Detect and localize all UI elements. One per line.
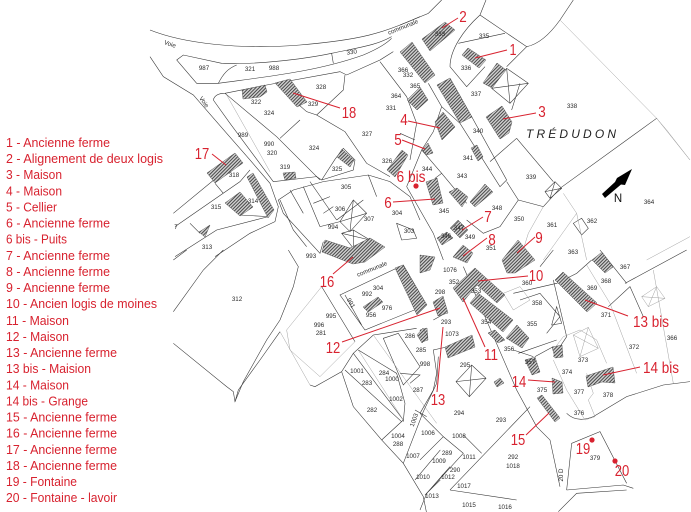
parcel numbers: 994 <box>328 224 339 231</box>
parcel numbers: 373 <box>578 357 589 364</box>
parcel numbers: 368 <box>601 278 612 285</box>
parcel numbers: 331 <box>386 105 397 112</box>
parcel numbers: Voie <box>197 95 210 110</box>
parcel numbers: 998 <box>420 361 431 368</box>
parcel numbers: 314 <box>248 198 259 205</box>
parcel numbers: 1001 <box>350 368 364 375</box>
parcel numbers: 1007 <box>406 453 420 460</box>
parcel numbers: 374 <box>562 369 573 376</box>
red map labels: 2 <box>459 9 467 26</box>
red map labels: 14 <box>512 374 527 391</box>
icon: north arrow <box>602 169 632 205</box>
legend: 7 - Ancienne ferme <box>6 249 110 263</box>
red map labels: 15 <box>511 432 525 449</box>
parcel numbers: 1016 <box>498 504 512 511</box>
parcel numbers: 367 <box>620 264 631 271</box>
legend: 16 - Ancienne ferme <box>6 426 117 440</box>
parcel numbers: 325 <box>332 166 343 173</box>
parcel numbers: 341 <box>463 155 474 162</box>
parcel numbers: 329 <box>308 101 319 108</box>
parcel numbers: 344 <box>422 166 433 173</box>
red map labels: 12 <box>326 340 340 357</box>
parcel numbers: 288 <box>393 441 404 448</box>
legend: 3 - Maison <box>6 168 62 182</box>
parcel numbers: 1008 <box>452 433 466 440</box>
parcel numbers: 1000 <box>385 376 399 383</box>
parcel numbers: 281 <box>316 330 327 337</box>
parcel numbers: 282 <box>367 407 378 414</box>
parcel numbers: 336 <box>461 65 472 72</box>
parcel numbers: 1002 <box>389 396 403 403</box>
parcel numbers: 1076 <box>443 267 457 274</box>
parcel numbers: 293 <box>496 417 507 424</box>
parcel numbers: 283 <box>362 380 373 387</box>
hatched buildings <box>199 22 615 422</box>
parcel numbers: 348 <box>492 205 503 212</box>
parcel numbers: 305 <box>341 184 352 191</box>
red map labels: 13 <box>431 392 445 409</box>
parcel numbers: 363 <box>568 249 579 256</box>
parcel numbers: 293 <box>441 319 452 326</box>
parcel numbers: 304 <box>392 210 403 217</box>
parcel numbers: 377 <box>574 389 585 396</box>
parcel numbers: 990 <box>264 141 275 148</box>
parcel numbers: 362 <box>587 218 598 225</box>
parcel numbers: communale <box>356 260 389 279</box>
parcel numbers: 993 <box>306 253 317 260</box>
red map labels: 5 <box>394 132 402 149</box>
parcel numbers: 350 <box>514 216 525 223</box>
parcel numbers: 315 <box>211 204 222 211</box>
parcel numbers: 988 <box>269 65 280 72</box>
legend: 4 - Maison <box>6 184 62 198</box>
parcel numbers: 322 <box>251 99 262 106</box>
parcel numbers: 287 <box>413 387 424 394</box>
legend <box>6 136 163 505</box>
parcel numbers: 995 <box>326 313 337 320</box>
legend: 2 - Alignement de deux logis <box>6 152 163 166</box>
parcel numbers: 313 <box>202 244 213 251</box>
parcel numbers: 361 <box>547 222 558 229</box>
red map labels: 6 bis <box>396 169 426 186</box>
parcel numbers: 335 <box>479 33 490 40</box>
parcel numbers: 1015 <box>462 502 476 509</box>
parcel numbers: 327 <box>362 131 373 138</box>
parcel numbers: 366 <box>398 67 409 74</box>
cadastral map: parcel lines <box>150 0 690 512</box>
parcel numbers: 371 <box>601 312 612 319</box>
parcel numbers: 321 <box>245 66 256 73</box>
parcel numbers: 284 <box>379 370 390 377</box>
parcel numbers: 294 <box>454 410 465 417</box>
parcel numbers: 372 <box>629 344 640 351</box>
parcel numbers: 364 <box>644 199 655 206</box>
parcel numbers: 328 <box>316 84 327 91</box>
parcel numbers: 991 <box>345 297 356 310</box>
parcel numbers: 338 <box>567 103 578 110</box>
legend: 9 - Ancienne ferme <box>6 281 110 295</box>
parcel numbers: 1006 <box>421 430 435 437</box>
parcel numbers: 1004 <box>391 433 405 440</box>
parcel numbers: 332 <box>403 72 414 79</box>
parcel numbers: 285 <box>416 347 427 354</box>
red map labels: 20 <box>615 463 630 480</box>
red map labels: 14 bis <box>643 360 679 377</box>
red map labels <box>195 9 679 480</box>
parcel numbers: 320 <box>267 150 278 157</box>
parcel numbers: 992 <box>362 291 373 298</box>
parcel numbers: 307 <box>364 216 375 223</box>
red map labels: 17 <box>195 146 209 163</box>
parcel numbers: 375 <box>537 387 548 394</box>
parcel numbers: 956 <box>366 312 377 319</box>
parcel numbers: 343 <box>457 173 468 180</box>
legend: 17 - Ancienne ferme <box>6 443 117 457</box>
legend: 15 - Ancienne ferme <box>6 410 117 424</box>
parcel numbers: 1011 <box>462 454 476 461</box>
parcel numbers: 303 <box>404 228 415 235</box>
parcel numbers: 337 <box>471 91 482 98</box>
parcel numbers: 379 <box>590 455 601 462</box>
legend: 8 - Ancienne ferme <box>6 265 110 279</box>
parcel numbers <box>163 18 678 511</box>
red map labels: 10 <box>529 268 544 285</box>
legend: 5 - Cellier <box>6 200 57 214</box>
red map labels: 4 <box>400 112 408 129</box>
parcel numbers: 286 <box>405 333 416 340</box>
parcel numbers: 1010 <box>416 474 430 481</box>
parcel numbers: 1012 <box>441 474 455 481</box>
parcel numbers: 346 <box>441 233 452 240</box>
parcel numbers: 1009 <box>432 458 446 465</box>
parcel numbers: 7 <box>174 224 178 231</box>
red leader lines <box>212 18 640 435</box>
parcel numbers: 353 <box>471 288 482 295</box>
parcel numbers: 355 <box>527 321 538 328</box>
parcel numbers: 347 <box>454 225 465 232</box>
parcel numbers: 326 <box>382 158 393 165</box>
parcel numbers: 365 <box>410 83 421 90</box>
parcel numbers: 330 <box>346 48 358 57</box>
parcel numbers: 349 <box>465 234 476 241</box>
place name: Trédudon: TRÉDUDON <box>526 126 616 141</box>
parcel numbers: 318 <box>229 172 240 179</box>
parcel numbers: 376 <box>574 410 585 417</box>
legend: 13 bis - Maision <box>6 362 91 376</box>
parcel numbers: 989 <box>238 132 249 139</box>
red map labels: 16 <box>320 274 334 291</box>
parcel numbers: 976 <box>382 305 393 312</box>
parcel numbers: 369 <box>587 285 598 292</box>
parcel numbers: 1003 <box>409 412 420 428</box>
legend: 12 - Maison <box>6 330 69 344</box>
legend: 10 - Ancien logis de moines <box>6 297 157 311</box>
parcel numbers: 364 <box>391 93 402 100</box>
red map labels: 1 <box>510 42 516 59</box>
red map labels: 6 <box>384 195 392 212</box>
parcel numbers: communale <box>387 18 420 37</box>
red map labels: 19 <box>576 441 590 458</box>
red map labels: 8 <box>488 232 496 249</box>
legend: 20 - Fontaine - lavoir <box>6 491 117 505</box>
legend: 19 - Fontaine <box>6 475 77 489</box>
parcel numbers: 319 <box>280 164 291 171</box>
parcel numbers: 295 <box>460 362 471 369</box>
red point markers: well and fountains <box>413 183 618 464</box>
parcel numbers: 298 <box>435 289 446 296</box>
icon: north arrow: N <box>614 193 622 205</box>
parcel numbers: 339 <box>526 174 537 181</box>
parcel numbers: 290 <box>450 467 461 474</box>
parcel numbers: 996 <box>314 322 325 329</box>
legend: 14 bis - Grange <box>6 394 88 408</box>
parcel numbers: 304 <box>373 285 384 292</box>
parcel numbers: 356 <box>504 346 515 353</box>
parcel numbers: 366 <box>667 335 678 342</box>
red map labels: 13 bis <box>633 314 669 331</box>
parcel numbers: 292 <box>508 454 519 461</box>
parcel numbers: 357 <box>525 359 536 366</box>
parcel numbers: 333 <box>435 31 446 38</box>
parcel numbers: 378 <box>603 392 614 399</box>
parcel numbers: 289 <box>442 450 453 457</box>
parcel numbers: 987 <box>199 65 210 72</box>
parcel numbers: 354 <box>481 319 492 326</box>
parcel numbers: Voie <box>163 39 177 50</box>
parcel numbers: 306 <box>335 206 346 213</box>
red map labels: 9 <box>535 230 543 247</box>
parcel numbers: 360 <box>522 280 533 287</box>
legend: 11 - Maison <box>6 314 69 328</box>
parcel numbers: 358 <box>532 300 543 307</box>
parcel numbers: 352 <box>449 279 460 286</box>
red map labels: 3 <box>538 104 546 121</box>
parcel numbers: 1018 <box>506 463 520 470</box>
legend: 1 - Ancienne ferme <box>6 136 110 150</box>
parcel numbers: 340 <box>473 128 484 135</box>
parcel numbers: 345 <box>439 208 450 215</box>
legend: 6 - Ancienne ferme <box>6 216 110 230</box>
legend: 6 bis - Puits <box>6 232 67 246</box>
legend: 14 - Maison <box>6 378 69 392</box>
red map labels: 11 <box>484 347 498 364</box>
parcel numbers: 324 <box>309 145 320 152</box>
parcel numbers: 312 <box>232 296 243 303</box>
parcel numbers: 1073 <box>445 331 459 338</box>
parcel numbers: 324 <box>264 110 275 117</box>
parcel numbers: 1017 <box>457 483 471 490</box>
parcel numbers: 1013 <box>425 493 439 500</box>
parcel numbers: 20 D <box>558 468 565 482</box>
red map labels: 7 <box>484 209 492 226</box>
red map labels: 18 <box>342 105 356 122</box>
legend: 18 - Ancienne ferme <box>6 459 117 473</box>
parcel numbers: 351 <box>486 245 497 252</box>
legend: 13 - Ancienne ferme <box>6 346 117 360</box>
